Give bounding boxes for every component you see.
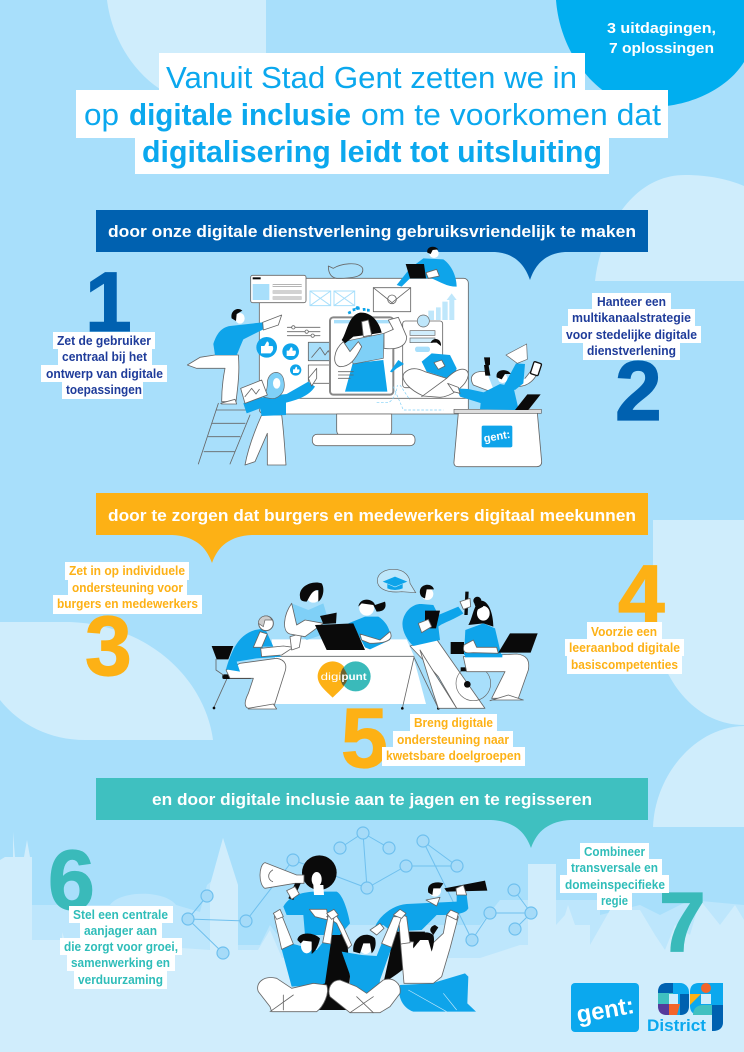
callout 1: ontwerp van digitale <box>46 367 163 381</box>
banner 3: en door digitale inclusie aan te jagen en te regisseren <box>152 790 592 809</box>
callout 6: verduurzaming <box>78 973 163 987</box>
logo: gent <box>571 983 639 1032</box>
sitting man <box>390 339 468 397</box>
number 7: 7 <box>659 875 706 969</box>
callout 7: regie <box>601 894 628 908</box>
number 4: 4 <box>618 548 665 642</box>
callout 5: Breng digitale <box>414 716 493 730</box>
woman standing behind <box>285 582 337 640</box>
banner 2 <box>96 493 648 563</box>
laptop <box>315 623 365 650</box>
person on ladder <box>187 309 282 404</box>
woman with hijab <box>241 368 317 465</box>
callout 3 <box>53 562 202 614</box>
title: Vanuit Stad Gent zetten we in <box>166 60 577 95</box>
screen dotted arrows <box>377 385 443 410</box>
number 3: 3 <box>85 599 132 693</box>
logo: district 09: District <box>647 1016 706 1035</box>
callout 6: die zorgt voor groei, <box>64 940 178 954</box>
desk with gent logo <box>454 409 542 467</box>
skyline <box>0 832 744 1052</box>
browser window <box>251 275 306 303</box>
callout 5: kwetsbare doelgroepen <box>386 749 521 763</box>
envelope <box>373 288 411 312</box>
ladder <box>198 403 250 464</box>
image cards <box>308 342 334 383</box>
network graph <box>182 827 537 959</box>
man behind desk <box>448 344 542 410</box>
callout 5: ondersteuning naar <box>397 733 509 747</box>
older man <box>226 616 302 709</box>
callout 1: centraal bij het <box>62 350 148 364</box>
right seated person <box>398 910 476 1012</box>
title: digitalisering leidt tot uitsluiting <box>142 134 602 169</box>
table <box>272 639 440 710</box>
logo: district 09 <box>647 983 723 1035</box>
bar chart <box>428 293 457 320</box>
afro woman <box>283 855 350 1010</box>
callout 4: basiscompetenties <box>571 658 678 672</box>
title: op <box>84 97 119 132</box>
woman at laptop <box>451 597 538 701</box>
cat <box>328 264 363 278</box>
background shapes <box>0 0 744 827</box>
callout 2 <box>562 293 701 360</box>
callout 4: leeraanbod digitale <box>569 641 680 655</box>
callout 2: Hanteer een <box>597 295 666 309</box>
form card <box>403 315 443 388</box>
banner 1 <box>96 210 648 280</box>
callout 4: Voorzie een <box>591 625 657 639</box>
woman with bun <box>348 600 391 649</box>
callout 3: ondersteuning voor <box>72 581 183 595</box>
callout 6 <box>60 906 182 989</box>
man with telescope <box>370 881 487 983</box>
number 2: 2 <box>615 344 662 438</box>
callout 4 <box>565 622 684 674</box>
callout 7: Combineer <box>584 845 645 859</box>
badge text: 3 uitdagingen, <box>607 20 716 37</box>
digipunt logo: punt <box>341 672 367 683</box>
rating stars <box>348 306 370 314</box>
banner 2: door te zorgen dat burgers en medewerkers digitaal meekunnen <box>108 506 636 525</box>
callout 6: samenwerking en <box>71 956 170 970</box>
thumbs up icons <box>256 337 301 376</box>
desk with gent logo: gent: <box>483 429 511 445</box>
callout 6: Stel een centrale <box>73 908 168 922</box>
sliders <box>287 326 320 337</box>
illustration: monitor and users <box>187 247 542 467</box>
callout 2: voor stedelijke digitale <box>566 328 697 342</box>
digipunt logo <box>318 661 371 698</box>
callout 2: dienstverlening <box>587 344 676 358</box>
monitor <box>259 278 468 446</box>
callout 3: burgers en medewerkers <box>57 597 198 611</box>
callout 7: transversale en <box>571 861 658 875</box>
wireframes <box>310 291 355 306</box>
callout 6: aanjager aan <box>84 924 157 938</box>
title: digitale inclusie <box>129 97 351 132</box>
callout 5 <box>382 714 525 766</box>
callout 1: toepassingen <box>66 383 142 397</box>
banner 1: door onze digitale dienstverlening gebruiksvriendelijk te maken <box>108 222 636 241</box>
badge text: 7 oplossingen <box>609 40 714 57</box>
callout 2: multikanaalstrategie <box>572 311 691 325</box>
illustration: digipunt table <box>212 569 538 710</box>
logo: gent: gent: <box>575 992 636 1029</box>
callout 1: Zet de gebruiker <box>57 334 151 348</box>
title <box>76 53 668 174</box>
video window with woman <box>330 313 407 395</box>
number 6: 6 <box>48 833 95 927</box>
callout 1 <box>41 332 167 399</box>
standing man <box>402 585 485 708</box>
callout 7 <box>560 843 669 910</box>
banner 3 <box>96 778 648 848</box>
left chair <box>212 646 252 709</box>
callout 7: domeinspecifieke <box>565 878 665 892</box>
digipunt logo: digi <box>321 672 341 683</box>
middle seated person <box>327 909 406 1013</box>
illustration: people with megaphone <box>258 855 487 1013</box>
callout 3: Zet in op individuele <box>69 564 185 578</box>
left seated person <box>258 909 338 1012</box>
number 1: 1 <box>85 255 132 349</box>
badge text <box>607 20 716 57</box>
number 5: 5 <box>341 691 388 785</box>
person on top of monitor <box>397 247 457 287</box>
title: om te voorkomen dat <box>361 97 661 132</box>
speech bubble <box>377 569 416 593</box>
megaphone <box>260 863 304 900</box>
